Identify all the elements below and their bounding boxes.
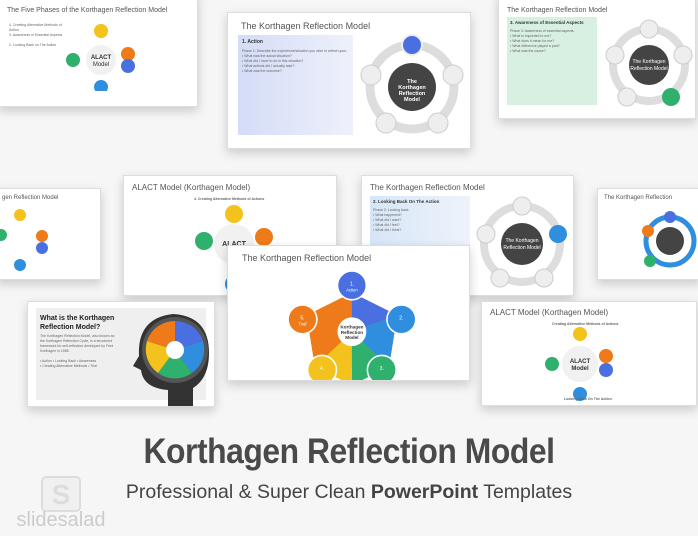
slide: ALACT bottom-right: Model <box>571 366 589 372</box>
slide: head (bottom-left): What is the Korthagen <box>40 315 114 322</box>
slide: looking back middle: Phase 2: Looking back. <box>373 208 409 212</box>
slide: awareness (top-right) <box>498 0 696 119</box>
slide: action (top-center): 1. Action <box>242 39 263 45</box>
slide: head (bottom-left): • Action • Looking Back • Awareness <box>40 359 96 363</box>
slide: action (top-center): • What actions did I actually take? <box>242 64 294 68</box>
slide: right: The Korthagen Reflection <box>604 195 672 201</box>
slide: awareness (top-right): The Korthagen <box>632 59 666 65</box>
slide: pentagon (front center): Reflection <box>341 330 363 335</box>
slide: awareness (top-right): 3. Awareness of Essential Aspects <box>510 20 584 25</box>
slide: ALACT middle <box>123 175 337 296</box>
slide: right <box>597 188 698 280</box>
slide: five phases (top-left): The Five Phases of the Korthagen Reflection Model <box>7 7 167 14</box>
slide: middle-left: gen Reflection Model <box>2 195 58 201</box>
title: Korthagen Reflection Model <box>143 432 555 471</box>
slide: pentagon (front center): Action <box>346 288 358 293</box>
slide: five phases (top-left): Model <box>93 62 109 68</box>
slide: action (top-center) <box>227 12 471 149</box>
slide: five phases (top-left): 2. Looking Back on The Action <box>9 43 56 47</box>
slide: action (top-center): • What was the actual situation? <box>242 54 292 58</box>
slide: ALACT bottom-right: ALACT <box>570 359 590 365</box>
icon: S badge: S <box>52 479 70 510</box>
slide: pentagon (front center): Model <box>345 335 359 340</box>
slide: looking back middle: • What did I want? <box>373 218 401 222</box>
slide: ALACT bottom-right <box>481 301 697 406</box>
slide: action (top-center): The Korthagen Reflection Model <box>241 21 370 31</box>
slide: pentagon (front center): Korthagen <box>340 325 364 330</box>
slide: action (top-center): • What was the outcome? <box>242 69 282 73</box>
slide: ALACT middle: ALACT Model (Korthagen Model) <box>132 183 250 192</box>
slide: action (top-center): The <box>407 79 417 85</box>
slide: pentagon (front center): 5. <box>300 315 305 321</box>
slide: looking back middle: • What happened? <box>373 213 402 217</box>
slide: awareness (top-right): The Korthagen Reflection Model <box>507 7 607 14</box>
slide: looking back middle: Reflection Model <box>503 245 541 251</box>
slide: ALACT middle: ALACT <box>222 241 247 248</box>
slide: ALACT bottom-right: Looking Back On The Action <box>564 397 612 401</box>
icon: S badge <box>41 476 81 512</box>
slide: looking back middle: The Korthagen Reflection Model <box>370 183 485 192</box>
slide: looking back middle: • What did I feel? <box>373 223 400 227</box>
slide: pentagon (front center): 1. <box>350 281 354 287</box>
slide: action (top-center): Phase 1: Describe the experience/situation you wish to reflect upon. <box>242 49 347 53</box>
slide: awareness (top-right): • What was the cause? <box>510 49 546 53</box>
slide: awareness (top-right): • What does it mean for me? <box>510 39 554 43</box>
subtitle: Professional & Super Clean PowerPoint Templates <box>126 481 572 503</box>
slide: looking back middle: 2. Looking Back On The Action <box>373 199 439 204</box>
slide: looking back middle: • What did I think? <box>373 228 401 232</box>
slide: pentagon (front center): Trail <box>299 322 306 327</box>
logo: slidesalad <box>17 476 105 531</box>
slide: five phases (top-left): 4. Creating Alternative Methods of Action <box>9 23 62 32</box>
slide: five phases (top-left): 3. Awareness of Essential Aspects <box>9 33 62 37</box>
slide: pentagon (front center): 3. <box>380 366 384 372</box>
slide: pentagon (front center) <box>227 245 470 381</box>
slide: ALACT middle: 4. Creating Alternative Methods of Actions <box>194 197 264 201</box>
slide: ALACT bottom-right: Creating Alternative Methods of Actions <box>552 322 618 326</box>
slide: looking back middle <box>361 175 574 296</box>
slide: action (top-center): Reflection <box>399 91 426 97</box>
slide: action (top-center): Korthagen <box>398 85 426 91</box>
slide: five phases (top-left) <box>0 0 198 107</box>
slide: head (bottom-left): Reflection Model? <box>40 324 100 331</box>
slide: head (bottom-left): The Korthagen Reflection Model, also known as the Korthagen Reflection Cycle, is a structured framework for self-reflection developed by Fred Korthagen in 1985. <box>40 334 114 353</box>
slide: action (top-center): Model <box>404 97 420 103</box>
slide: pentagon (front center): The Korthagen Reflection Model <box>242 253 371 263</box>
slide: head (bottom-left) <box>27 301 215 407</box>
slide: action (top-center): • What did I have to do in this situation? <box>242 59 303 63</box>
slide: awareness (top-right): Phase 3: Awareness of essential aspects. <box>510 29 575 33</box>
slide: looking back middle: The Korthagen <box>505 238 539 244</box>
slide: awareness (top-right): • What difference played a part? <box>510 44 560 48</box>
slide: middle-left <box>0 188 101 280</box>
slide: head (bottom-left): • Creating Alternative Methods • Trial <box>40 364 97 368</box>
logo: slidesalad: slidesalad <box>17 509 105 531</box>
slide: five phases (top-left): ALACT <box>91 55 111 61</box>
slide: awareness (top-right): Reflection Model <box>630 66 668 72</box>
slide: ALACT bottom-right: ALACT Model (Korthagen Model) <box>490 308 608 317</box>
slide: awareness (top-right): • What is important to me? <box>510 34 551 38</box>
slide: pentagon (front center): 4. <box>320 366 324 372</box>
slide: pentagon (front center): 2. <box>399 315 404 321</box>
